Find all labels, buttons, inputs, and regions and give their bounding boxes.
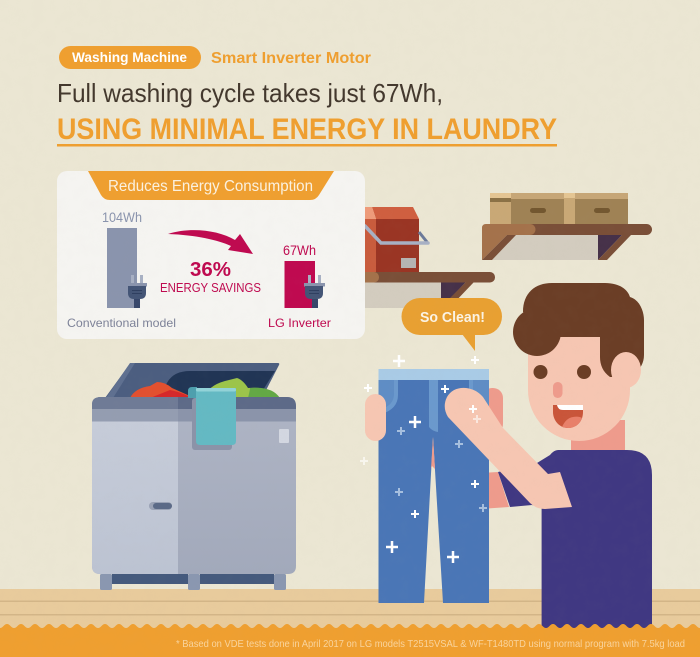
icon: plug inverter [304,275,325,308]
title highlight: USING MINIMAL ENERGY IN LAUNDRY [57,113,557,146]
savings text: 36% [190,259,231,281]
person arm [445,388,572,509]
panel: reduces energy consumption [57,171,365,339]
bar: conventional: 104Wh [102,210,142,225]
hair [513,283,644,377]
subtitle: Smart Inverter Motor [211,50,371,67]
bar: LG inverter: 67Wh [283,243,316,258]
arrow [168,230,253,254]
person neck and back hand [480,388,625,509]
labels: Conventional model [67,316,176,330]
savings text: ENERGY SAVINGS [160,281,261,295]
bar: conventional [102,210,142,308]
banner [88,171,334,200]
bar: LG inverter [283,243,316,308]
person left hand [365,394,386,441]
labels: LG Inverter [268,316,331,330]
speech bubble [402,298,502,351]
towel [188,387,236,450]
icon: plug conventional [128,275,147,308]
shelf: lower with red box [360,207,495,308]
shelf: upper with boxes [482,193,652,260]
person body [498,450,652,628]
sparkles [360,355,487,563]
footer band [0,623,700,657]
jeans [378,369,489,603]
floor [0,589,700,629]
person head [513,283,644,441]
tag: washing machine [59,46,201,69]
speech bubble: So Clean! [420,310,485,326]
mouth [553,405,583,428]
tag: washing machine: Washing Machine [72,49,187,65]
labels [67,316,331,330]
savings text [160,259,261,295]
title line: Full washing cycle takes just 67Wh, [57,78,443,108]
banner: Reduces Energy Consumption [108,178,313,195]
washing machine [92,363,296,590]
